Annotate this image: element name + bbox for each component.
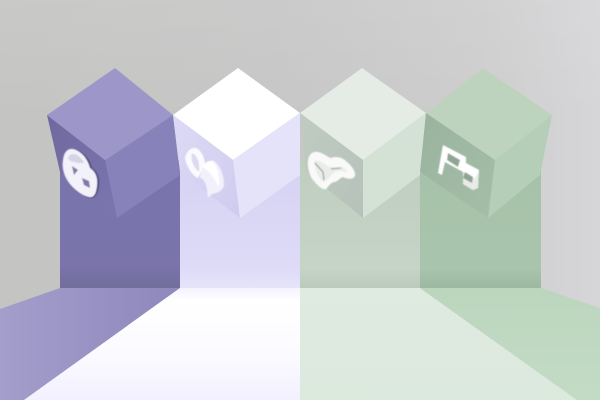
cube: purple with lock icon: [47, 68, 180, 218]
wall strip: purple: [60, 160, 180, 288]
floor band: white: [24, 288, 300, 400]
floor band: pale green: [300, 288, 577, 400]
cube: green with flag icon: [420, 68, 552, 218]
icon: flag: [438, 145, 479, 190]
wall strip: pale green: [300, 160, 420, 288]
icon: curled hook: [185, 148, 224, 198]
floor band: green: [420, 288, 600, 400]
cube: pale green with bird icon: [300, 68, 426, 218]
icon: bird outline: [308, 152, 355, 189]
wall strip: green: [420, 160, 541, 288]
wall strip: lavender: [180, 160, 300, 288]
floor band: purple: [0, 288, 180, 400]
cube: white with hook icon: [173, 68, 300, 218]
icon: lock: [63, 149, 99, 198]
